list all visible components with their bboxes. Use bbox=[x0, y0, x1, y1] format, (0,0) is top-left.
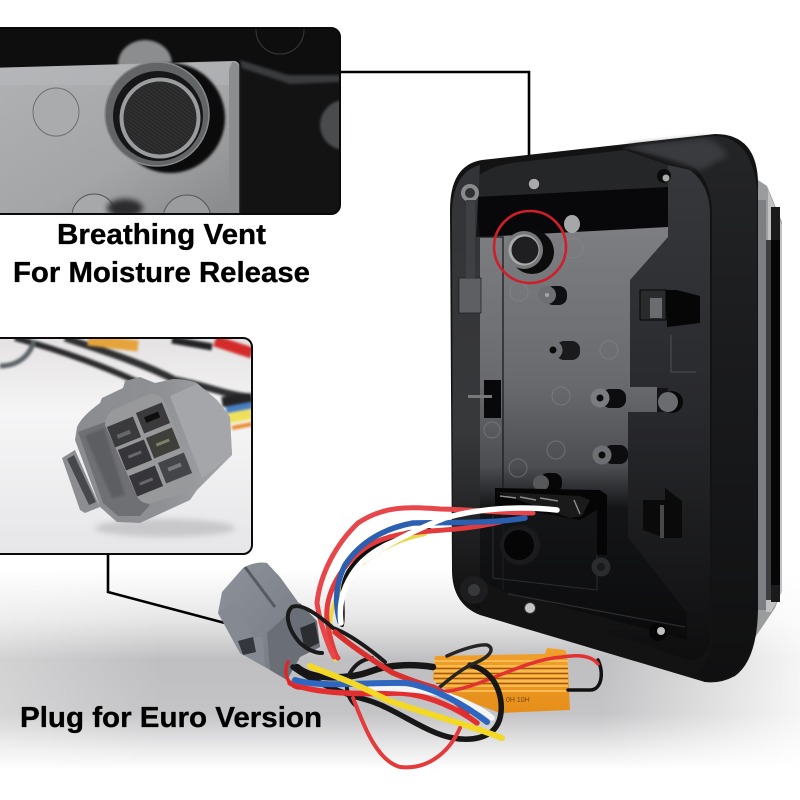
resistor output wires bbox=[440, 656, 601, 692]
left channel bbox=[452, 165, 480, 610]
vent light ring bbox=[120, 78, 200, 158]
inset background bbox=[0, 338, 252, 554]
corner boss top left bbox=[461, 184, 479, 202]
wiring harness lower knot bbox=[286, 606, 502, 767]
socket 5 bbox=[129, 466, 163, 496]
connector face bbox=[105, 394, 168, 504]
connector body bbox=[75, 377, 232, 523]
leader line: plug inset to plug bbox=[108, 554, 240, 627]
lower pin bbox=[592, 558, 610, 576]
plate left divider bbox=[480, 237, 503, 590]
connector inner cavity bbox=[78, 422, 150, 516]
wiring harness upper bundle bbox=[317, 508, 557, 660]
vent on lamp bbox=[505, 230, 554, 274]
plug front cap bbox=[218, 603, 265, 667]
lower corner boss bbox=[460, 576, 488, 604]
plug main shell bbox=[218, 563, 320, 680]
right block bbox=[240, 60, 340, 214]
plug inset panel bbox=[0, 338, 252, 554]
bottom ghost circle left bbox=[72, 194, 116, 213]
inset border bbox=[0, 338, 252, 554]
red highlight circle bbox=[494, 211, 566, 283]
black wire bbox=[342, 530, 430, 625]
heading: for moisture release: For Moisture Release bbox=[13, 257, 310, 289]
black upper band bbox=[476, 187, 668, 237]
cavity dark streak bbox=[85, 428, 125, 498]
vent inset panel bbox=[0, 27, 341, 215]
socket 3 bbox=[118, 440, 152, 470]
lower box outline bbox=[493, 515, 597, 590]
right side strip of housing bbox=[748, 178, 782, 642]
socket 4 bbox=[146, 428, 180, 458]
slot pin bbox=[468, 395, 492, 398]
plug ridge bbox=[245, 567, 275, 607]
left clip block bbox=[459, 278, 481, 313]
tail lamp rear housing bbox=[450, 134, 782, 682]
collar cavity bbox=[300, 622, 319, 650]
white wire bbox=[367, 688, 492, 718]
yellow wire bbox=[310, 666, 502, 738]
euro plug connector bbox=[218, 563, 320, 680]
vent membrane bbox=[124, 82, 196, 154]
lower housing groove bbox=[508, 594, 685, 627]
grey plate bbox=[0, 61, 240, 214]
right side shoulder shading bbox=[170, 384, 232, 478]
black ring tie bbox=[347, 658, 372, 705]
top band of lamp interior bbox=[476, 150, 668, 200]
black lower wire bbox=[293, 665, 501, 739]
inset dark background bbox=[0, 29, 339, 78]
background bump bbox=[116, 38, 174, 64]
plate top highlight band bbox=[0, 62, 232, 85]
faint panel outline bbox=[671, 335, 696, 372]
heading: breathing vent: Breathing Vent bbox=[57, 219, 267, 251]
right inner panel bbox=[600, 165, 710, 660]
top screw 1 bbox=[528, 178, 540, 190]
right rim bbox=[622, 136, 757, 682]
leader line: vent inset to red circle bbox=[328, 72, 529, 211]
white wire bbox=[340, 508, 557, 623]
lower vent bbox=[500, 525, 540, 565]
left boss stem bbox=[466, 200, 475, 278]
central grey plate bbox=[480, 227, 687, 640]
red wires bbox=[290, 683, 477, 723]
rim highlight bbox=[625, 138, 728, 170]
socket 1 bbox=[107, 417, 141, 447]
inset border bbox=[0, 28, 340, 214]
faint ghost circles on plate bbox=[484, 238, 618, 477]
upper black arc bbox=[440, 645, 491, 687]
red hanging loop bbox=[353, 698, 460, 767]
top center bump bbox=[564, 215, 580, 233]
outer housing silhouette bbox=[450, 134, 758, 682]
ghost circle bbox=[33, 88, 79, 136]
black sleeve bbox=[297, 665, 433, 677]
side clip lower bbox=[643, 488, 682, 538]
blurred background wires bbox=[0, 338, 252, 428]
vent shadow bbox=[133, 61, 227, 175]
connector seal bracket bbox=[495, 488, 607, 555]
mounting posts bbox=[533, 286, 683, 492]
heading: plug for euro version: Plug for Euro Version bbox=[20, 702, 322, 734]
yellow wire bbox=[330, 534, 425, 660]
lower screw 2 bbox=[649, 623, 667, 641]
smudge bbox=[107, 199, 143, 217]
socket 6 bbox=[158, 453, 192, 483]
background ring top right bbox=[256, 29, 304, 54]
lower screw 1 bbox=[524, 602, 536, 614]
socket 2 bbox=[136, 403, 170, 433]
blue wire bbox=[295, 680, 487, 722]
resistor block bbox=[433, 648, 570, 713]
plug rear collar bbox=[267, 603, 320, 680]
plug end red coil bbox=[286, 662, 300, 688]
plate rib bbox=[229, 62, 240, 164]
vent outer ring bbox=[105, 62, 209, 166]
side clip upper bbox=[640, 290, 700, 327]
connector shadow bbox=[95, 519, 235, 537]
blue wire bbox=[337, 518, 525, 622]
resistor marking text: 0H 10H bbox=[506, 697, 530, 704]
plug socket hole bbox=[238, 637, 256, 655]
bottom ghost circle right bbox=[163, 194, 211, 213]
left locking tab bbox=[62, 450, 100, 513]
vent dark inner ring bbox=[113, 71, 203, 161]
red wire inner bbox=[327, 522, 500, 658]
top screw 2 bbox=[657, 169, 671, 183]
left black slot bbox=[484, 380, 501, 418]
black loop around plug collar bbox=[288, 606, 385, 662]
red wire outer bbox=[317, 508, 533, 657]
